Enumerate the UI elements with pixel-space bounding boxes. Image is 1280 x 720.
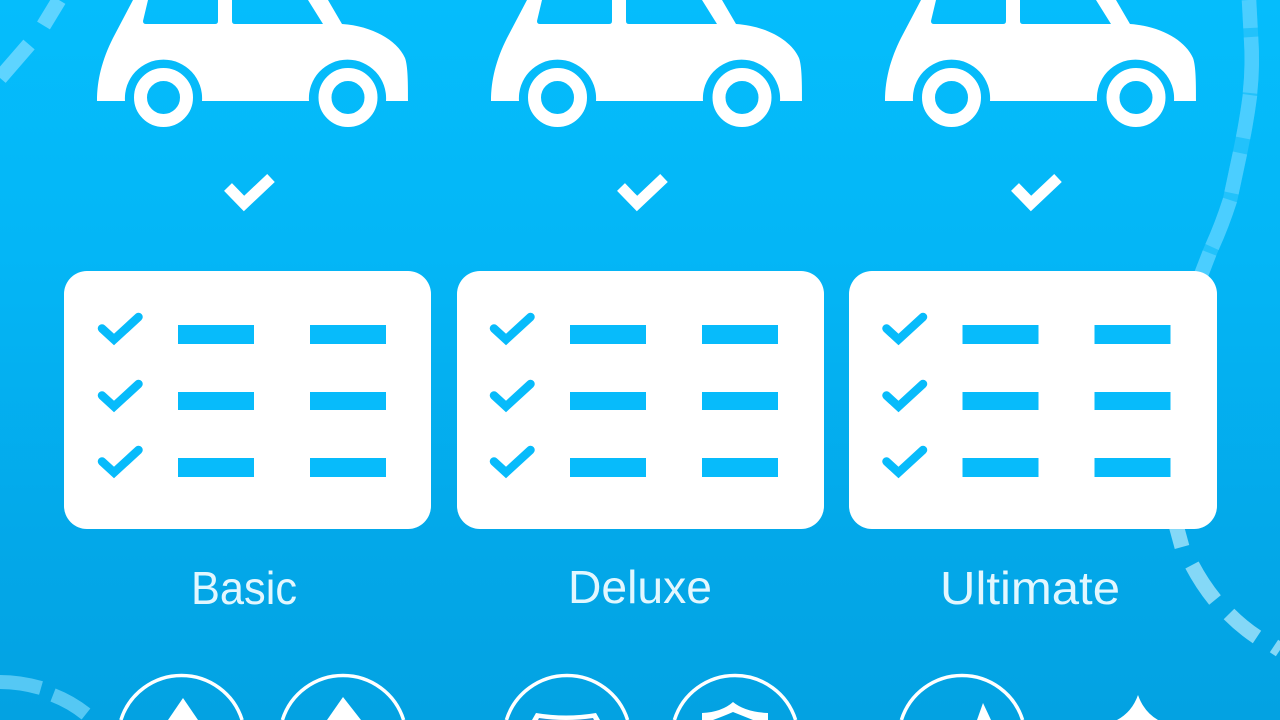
label: Basic: Basic <box>191 562 297 614</box>
dashed arc: lower right <box>1176 525 1280 650</box>
car: basic <box>97 0 408 120</box>
panel: deluxe features <box>457 271 824 529</box>
icon: circle with shield badge <box>506 675 628 720</box>
dashed arc: bottom left <box>0 682 86 714</box>
label: Ultimate: Ultimate <box>940 562 1120 614</box>
panel: basic features <box>64 271 431 529</box>
panel: ultimate features <box>849 271 1217 529</box>
icon: circle with shield outline <box>674 675 796 720</box>
icon: star <box>1117 695 1158 720</box>
icon: circle with peak 2 <box>282 675 404 720</box>
label: Deluxe: Deluxe <box>568 561 712 613</box>
car: deluxe <box>491 0 802 120</box>
icon: circle with peak 1 <box>121 675 242 720</box>
check mark: deluxe <box>621 178 664 204</box>
check mark: ultimate <box>1015 178 1058 204</box>
car: ultimate <box>885 0 1196 120</box>
dashed arc: top left <box>0 0 59 78</box>
check mark: basic <box>228 178 271 204</box>
dashed arc: right <box>1201 0 1252 275</box>
icon: circle with spike <box>901 675 1023 720</box>
